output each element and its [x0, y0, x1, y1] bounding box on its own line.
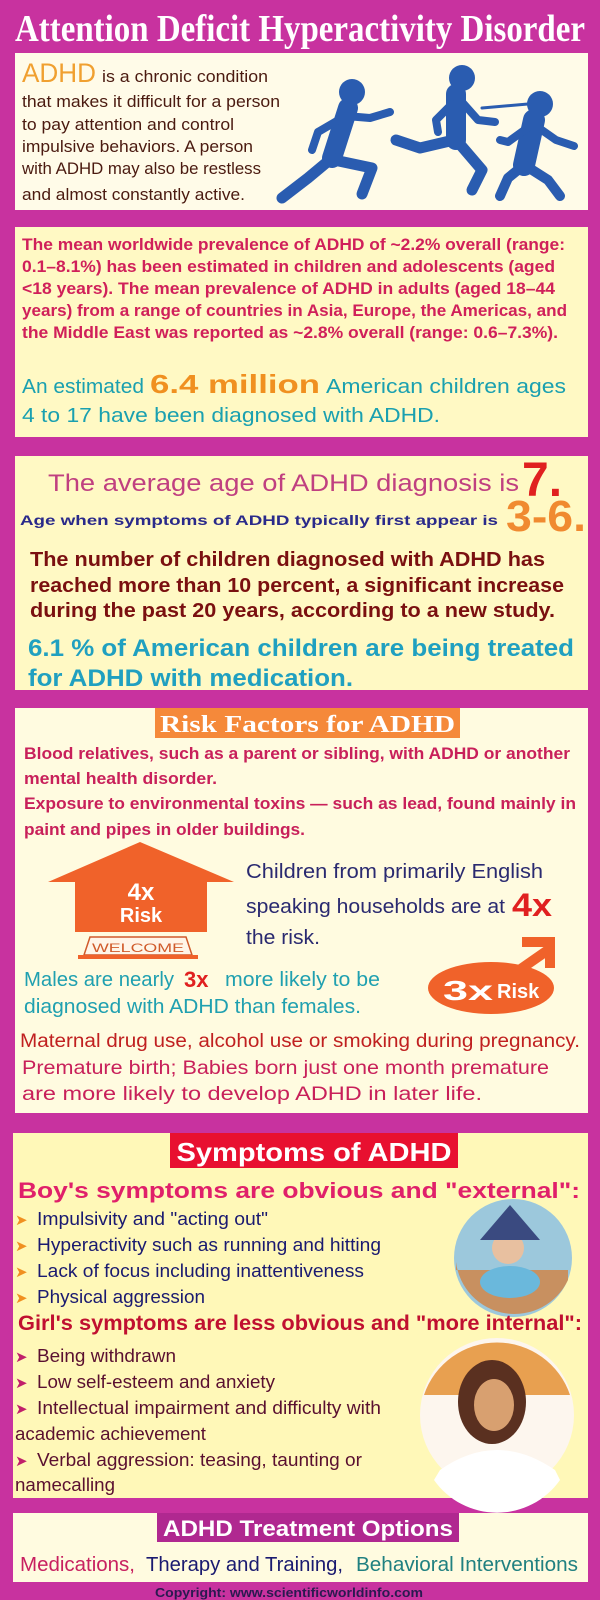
- english households text: [246, 861, 552, 949]
- heading: symptoms: Symptoms of ADHD: [176, 1137, 452, 1167]
- males text: 3x: [184, 967, 209, 992]
- prevalence text: years) from a range of countries in Asia, Europe, the Americas, and: [22, 301, 567, 320]
- girls symptoms list: namecalling: [15, 1475, 115, 1495]
- icon: male symbol 3x risk: 3x: [443, 975, 494, 1006]
- risk text: relatives and toxins: [24, 744, 576, 839]
- intro text: is a chronic condition: [102, 67, 268, 86]
- intro text: that makes it difficult for a person: [22, 92, 280, 111]
- stat: 6.4 million: [22, 369, 566, 427]
- prevalence text: <18 years). The mean prevalence of ADHD in adults (aged 18–44: [22, 279, 556, 298]
- risk text: relatives and toxins: mental health disorder.: [24, 769, 217, 788]
- males text: Males are nearly: [24, 969, 174, 991]
- 10 percent text: The number of children diagnosed with ADHD has: [30, 549, 545, 571]
- panel: age stats: [15, 454, 588, 692]
- girls symptoms list: Intellectual impairment and difficulty with: [37, 1398, 381, 1418]
- heading: risk factors: Risk Factors for ADHD: [160, 712, 455, 738]
- symptom onset age: [20, 492, 586, 541]
- boys symptoms list: [15, 1209, 381, 1307]
- english households text: 4x: [512, 887, 552, 923]
- average age: 7.: [522, 454, 562, 507]
- icon: house 4x risk: [48, 842, 234, 959]
- boys symptoms list: Impulsivity and "acting out": [37, 1209, 268, 1229]
- intro text: ADHD: [22, 58, 96, 88]
- maternal and premature text: are more likely to develop ADHD in later life.: [22, 1084, 482, 1105]
- heading: risk factors: [155, 708, 460, 738]
- prevalence text: [22, 235, 567, 342]
- icon: running children: [282, 65, 574, 198]
- boys symptoms list: Physical aggression: [37, 1287, 205, 1307]
- icon: house 4x risk: Risk: [120, 905, 163, 927]
- maternal and premature text: Premature birth; Babies born just one month premature: [22, 1058, 549, 1079]
- males text: diagnosed with ADHD than females.: [24, 996, 361, 1018]
- treatment list: Behavioral Interventions: [356, 1554, 578, 1576]
- icon: male symbol 3x risk: Risk: [497, 981, 540, 1003]
- english households text: the risk.: [246, 927, 320, 949]
- males text: [24, 967, 380, 1018]
- girls symptoms list: ➤: [15, 1401, 28, 1418]
- boys heading: Boy's symptoms are obvious and "external":: [18, 1178, 580, 1203]
- symptom onset age: 3-6.: [506, 492, 586, 541]
- panel: risk factors: [15, 708, 588, 1113]
- medication stat: 6.1 % of American children are being treated: [28, 635, 574, 662]
- girls symptoms list: ➤: [15, 1349, 28, 1366]
- prevalence text: the Middle East was reported as ~2.8% overall (range: 0.6–7.3%).: [22, 323, 558, 342]
- boys symptoms list: ➤: [15, 1212, 28, 1229]
- intro text: to pay attention and control: [22, 115, 234, 134]
- 10 percent text: during the past 20 years, according to a new study.: [30, 600, 555, 622]
- boys symptoms list: Hyperactivity such as running and hitting: [37, 1235, 381, 1255]
- medication stat: [28, 635, 574, 692]
- stat: 6.4 million: American children ages: [326, 376, 566, 398]
- english households text: speaking households are at: [246, 896, 505, 918]
- girls symptoms list: ➤: [15, 1453, 28, 1470]
- intro text: impulsive behaviors. A person: [22, 137, 253, 156]
- stat: 6.4 million: An estimated: [22, 376, 144, 398]
- heading: treatment: ADHD Treatment Options: [163, 1516, 453, 1541]
- girls symptoms list: Being withdrawn: [37, 1346, 176, 1366]
- intro text: [21, 58, 280, 204]
- stat: 6.4 million: 4 to 17 have been diagnosed with ADHD.: [22, 405, 440, 427]
- icon: male symbol 3x risk: [428, 937, 555, 1014]
- girls symptoms list: Low self-esteem and anxiety: [37, 1372, 275, 1392]
- girls symptoms list: [15, 1346, 381, 1495]
- treatment list: Medications,: [20, 1554, 135, 1576]
- girls symptoms list: ➤: [15, 1375, 28, 1392]
- risk text: relatives and toxins: paint and pipes in older buildings.: [24, 820, 305, 839]
- icon: house 4x risk: WELCOME: [92, 941, 184, 955]
- average age: [48, 454, 562, 507]
- treatment list: [20, 1554, 578, 1576]
- english households text: Children from primarily English: [246, 861, 543, 883]
- 10 percent text: [30, 549, 564, 622]
- panel: treatment options: [13, 1513, 588, 1582]
- intro text: with ADHD may also be restless: [21, 159, 261, 178]
- boys symptoms list: Lack of focus including inattentiveness: [37, 1261, 364, 1281]
- maternal and premature text: [20, 1031, 580, 1105]
- image: boy with book: [454, 1199, 572, 1317]
- girls symptoms list: academic achievement: [15, 1424, 206, 1444]
- intro text: and almost constantly active.: [22, 185, 245, 204]
- copyright: Copyright: www.scientificworldinfo.com: [155, 1585, 423, 1600]
- symptom onset age: Age when symptoms of ADHD typically first appear is: [20, 512, 498, 528]
- girls heading: Girl's symptoms are less obvious and "more internal":: [18, 1312, 582, 1335]
- boys symptoms list: ➤: [15, 1290, 28, 1307]
- risk text: relatives and toxins: Blood relatives, such as a parent or sibling, with ADHD or another: [24, 744, 570, 763]
- treatment list: Therapy and Training,: [146, 1554, 343, 1576]
- average age: The average age of ADHD diagnosis is: [48, 470, 519, 497]
- boys symptoms list: ➤: [15, 1264, 28, 1281]
- image: girl thinking: [420, 1338, 574, 1513]
- panel: prevalence: [15, 227, 588, 437]
- 10 percent text: reached more than 10 percent, a significant increase: [30, 575, 564, 597]
- prevalence text: 0.1–8.1%) has been estimated in children and adolescents (aged: [22, 257, 555, 276]
- panel: symptoms: [13, 1133, 588, 1513]
- panel: intro: [15, 53, 588, 210]
- stat: 6.4 million: 6.4 million: [150, 369, 320, 399]
- icon: house 4x risk: 4x: [128, 879, 155, 906]
- boys symptoms list: ➤: [15, 1238, 28, 1255]
- prevalence text: The mean worldwide prevalence of ADHD of ~2.2% overall (range:: [22, 235, 565, 254]
- males text: more likely to be: [225, 969, 380, 991]
- risk text: relatives and toxins: Exposure to environmental toxins — such as lead, found mainly in: [24, 794, 576, 813]
- maternal and premature text: Maternal drug use, alcohol use or smoking during pregnancy.: [20, 1031, 580, 1052]
- girls symptoms list: Verbal aggression: teasing, taunting or: [37, 1450, 362, 1470]
- medication stat: for ADHD with medication.: [28, 665, 353, 692]
